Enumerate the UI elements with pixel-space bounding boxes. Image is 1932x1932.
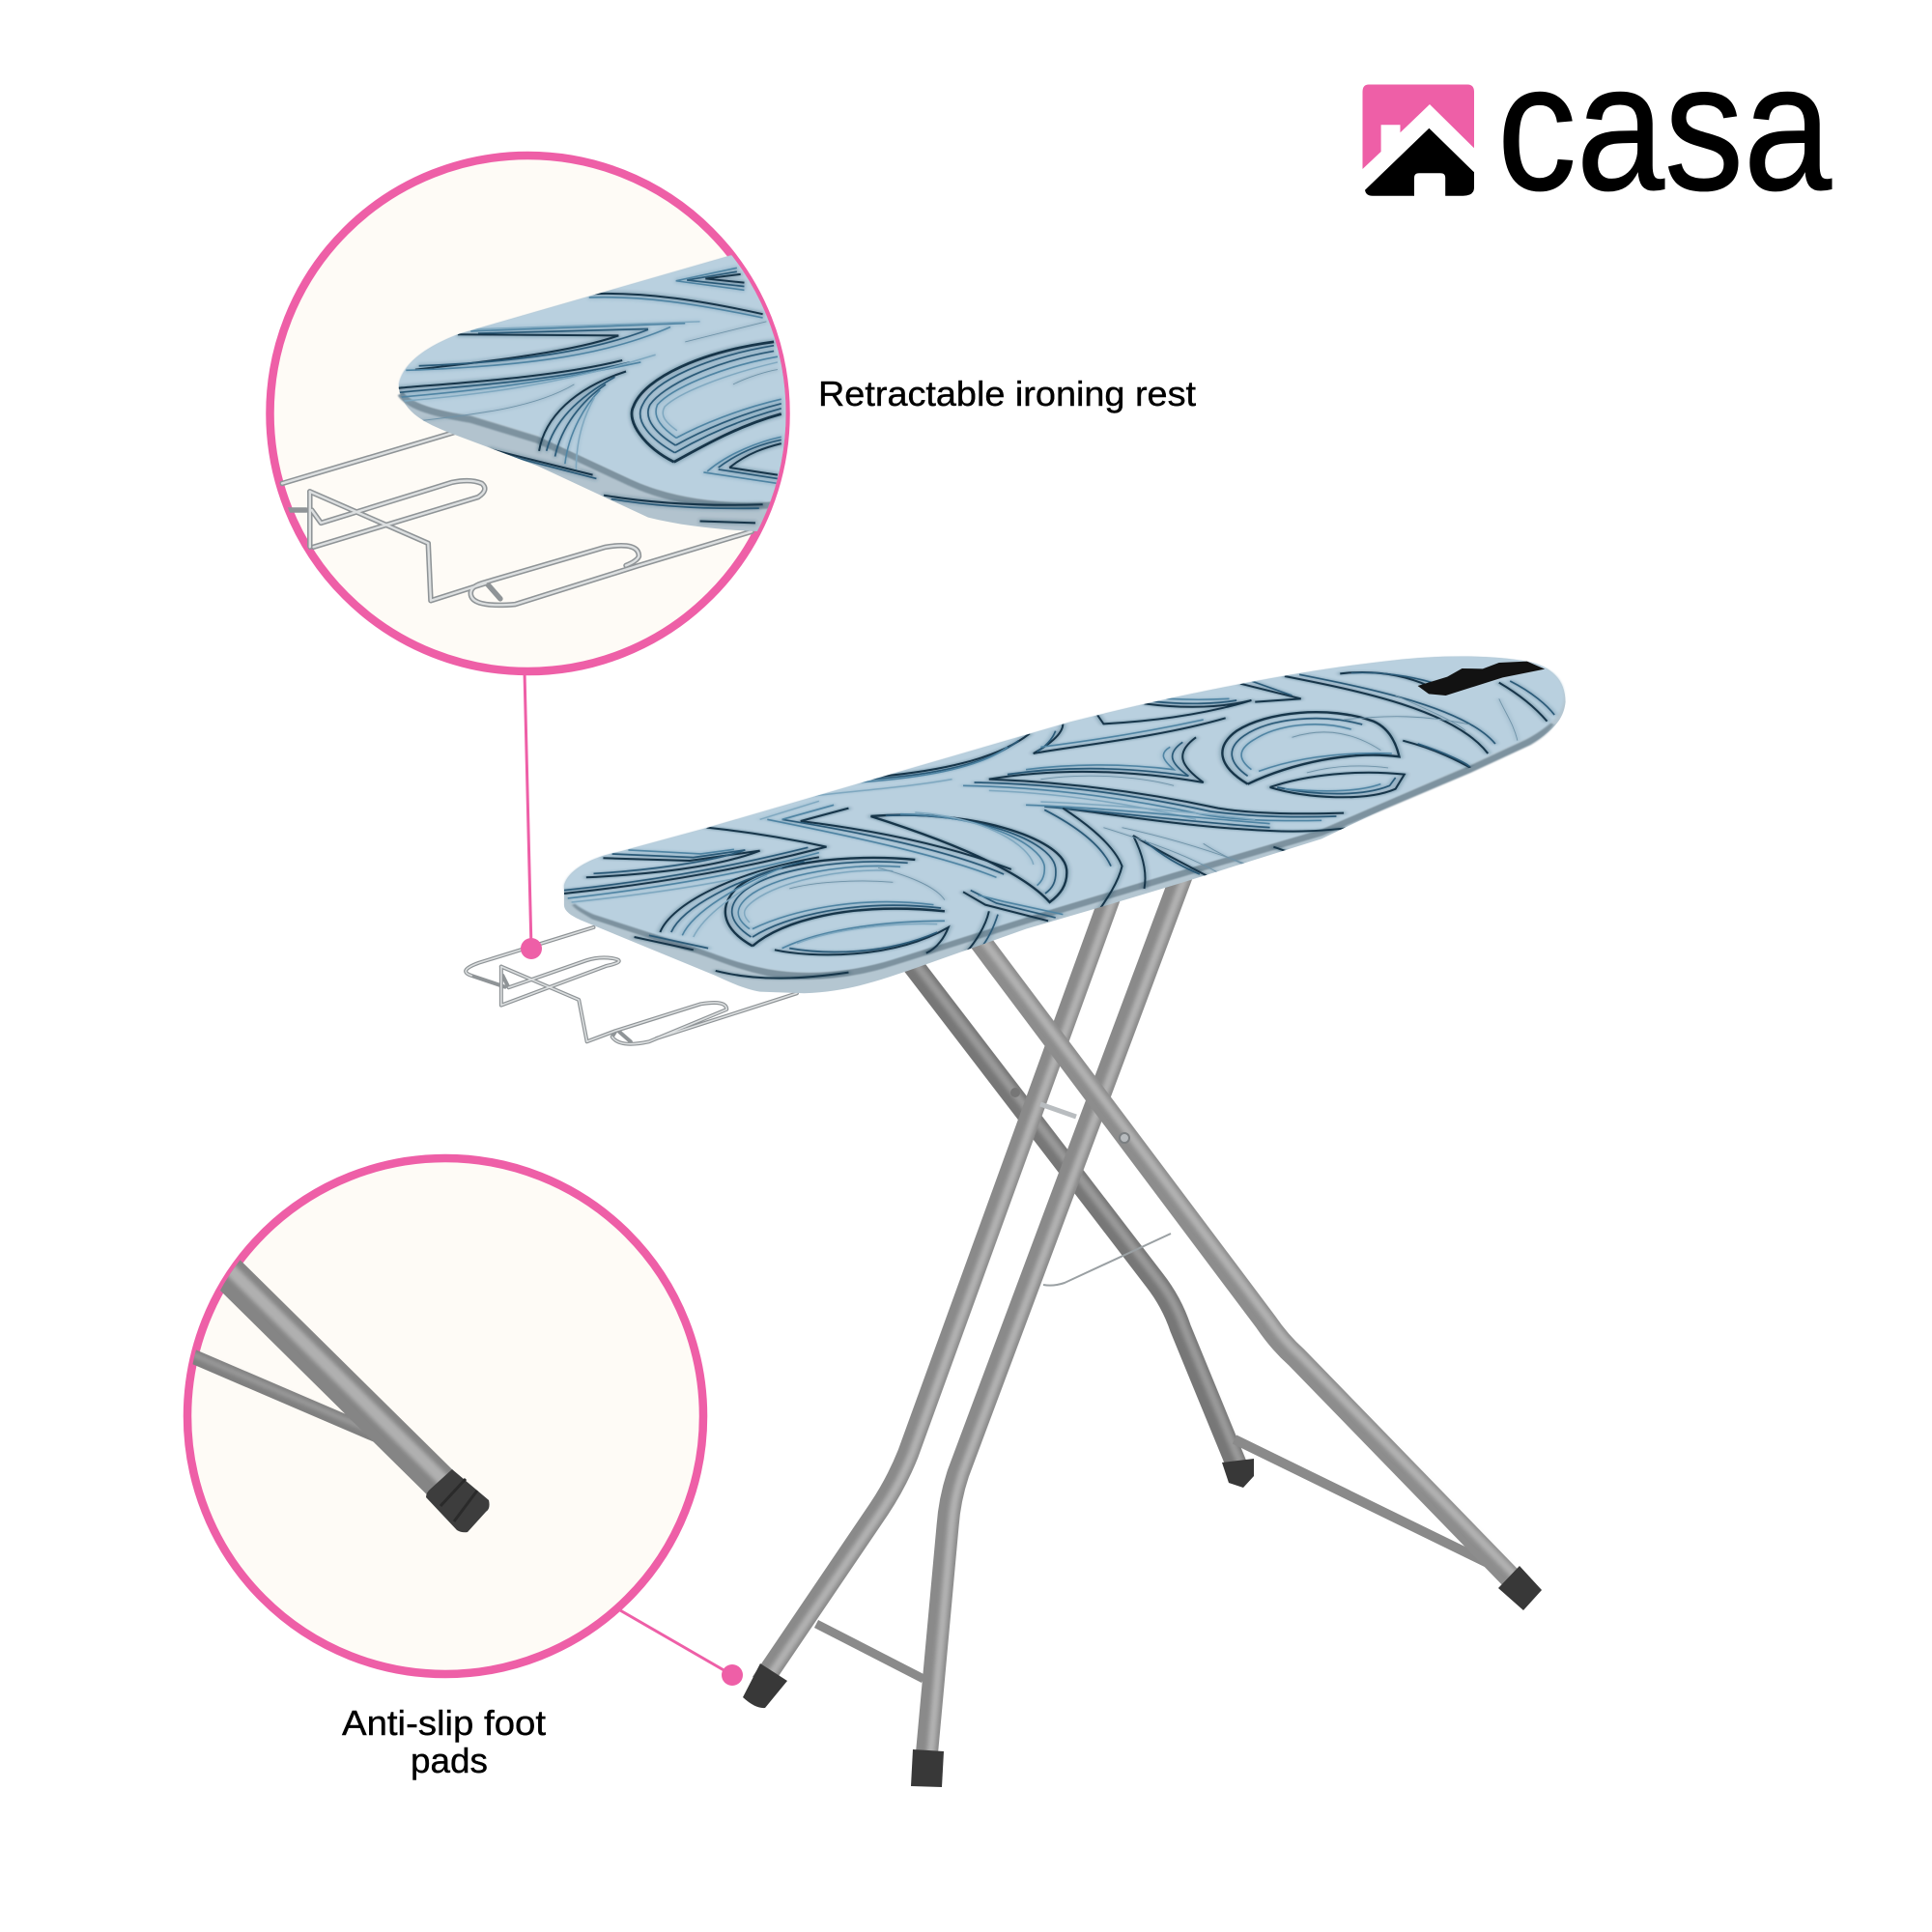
cover pattern xyxy=(564,672,1554,979)
label: retractable ironing rest: Retractable ironing rest xyxy=(818,374,1196,413)
logo pink roof square xyxy=(1362,85,1474,169)
inset fabric pattern xyxy=(399,268,781,523)
back leg xyxy=(884,927,1244,1474)
inset board surface xyxy=(398,255,786,502)
fan lines near edge xyxy=(1044,809,1293,915)
band upper middle xyxy=(805,733,1030,797)
board top surface xyxy=(564,657,1564,972)
leader line: foot pads xyxy=(620,1610,732,1675)
left chevron xyxy=(586,849,760,877)
pointer dot: ironing rest xyxy=(521,938,542,959)
pointer dot: foot pads xyxy=(722,1664,743,1686)
front-right leg xyxy=(952,903,1530,1594)
board with patterned cover xyxy=(564,657,1566,993)
inset leg tube xyxy=(217,1263,454,1496)
front-left leg xyxy=(761,855,1129,1683)
support wires xyxy=(1010,1088,1207,1286)
leader line: ironing rest xyxy=(525,672,531,949)
top chevron xyxy=(1034,698,1251,753)
far left band xyxy=(660,857,819,937)
icon: casa logo mark xyxy=(1362,85,1474,196)
label: anti-slip foot pads: pads xyxy=(411,1741,488,1780)
upper sweep xyxy=(989,737,1204,785)
wire ironing rest xyxy=(466,927,797,1044)
inset foot: leg, strut and rubber pad xyxy=(184,1260,490,1532)
lower leaf xyxy=(775,921,949,954)
left leaf xyxy=(725,858,945,946)
upper right strands xyxy=(1240,672,1554,771)
left sweep xyxy=(564,828,827,902)
inset strut xyxy=(184,1352,382,1437)
right leaf top xyxy=(1222,712,1399,784)
pivot rivet xyxy=(1120,1133,1129,1143)
back rubber foot xyxy=(1222,1459,1254,1488)
logo black house xyxy=(1365,128,1474,196)
panel: anti-slip foot pad detail circle xyxy=(184,1158,703,1674)
black handle slot xyxy=(1418,662,1545,696)
right leaf bottom xyxy=(1270,766,1405,797)
front-left rubber foot xyxy=(743,1663,787,1708)
ironing board illustration xyxy=(466,657,1566,1787)
central long sweep xyxy=(963,780,1344,821)
front-right rubber foot xyxy=(1498,1566,1542,1610)
rear crossbar xyxy=(1235,1439,1488,1563)
front crossbar xyxy=(816,1624,923,1679)
centre chevron sweep xyxy=(760,801,1011,877)
front-centre leg xyxy=(926,845,1197,1758)
lower right marks xyxy=(635,891,1063,979)
panel: ironing rest detail circle xyxy=(270,156,804,671)
label: anti-slip foot pads: Anti-slip foot xyxy=(342,1703,546,1743)
logo wordmark: casa xyxy=(1497,26,1832,228)
centre crescent xyxy=(870,812,1066,902)
inset rubber pad xyxy=(426,1469,490,1532)
board side edge xyxy=(564,657,1566,993)
inset wire rest xyxy=(282,433,752,605)
inset: wire iron rest and board tip xyxy=(282,237,804,605)
inset board side xyxy=(398,255,786,531)
lower long sweep xyxy=(1026,802,1348,832)
front-centre rubber foot xyxy=(911,1749,944,1787)
